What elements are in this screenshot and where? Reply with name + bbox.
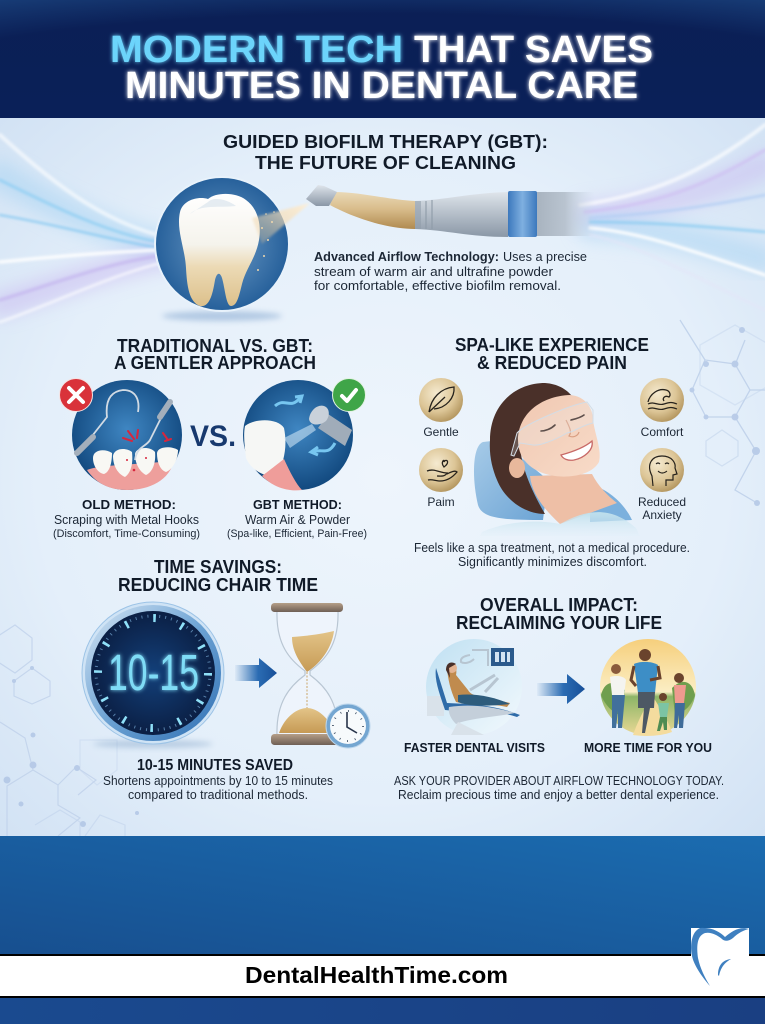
molecular hexagon pattern: left	[0, 625, 139, 836]
title: MINUTES IN DENTAL CARE	[125, 65, 638, 107]
logo: tooth mark	[691, 928, 749, 986]
hair	[490, 383, 572, 514]
face	[518, 395, 600, 477]
heading: overall impact	[456, 595, 662, 633]
heading: spa-like: SPA-LIKE EXPERIENCE	[455, 335, 649, 355]
text: GBT method: (Spa-like, Efficient, Pain-Free)	[227, 528, 367, 540]
heading: time savings	[118, 557, 318, 595]
icon: reduced anxiety head	[640, 448, 684, 492]
text: old method: Scraping with Metal Hooks	[54, 513, 199, 527]
heading: spa-like	[455, 335, 649, 373]
section: traditional vs GBT	[53, 336, 367, 540]
label: Reduced Anxiety: Reduced	[638, 495, 686, 509]
safety glasses	[511, 402, 593, 456]
chair headrest	[474, 440, 548, 520]
text: old method	[53, 497, 200, 540]
icon: tooth in circle	[155, 177, 289, 311]
heading: traditional vs GBT: A GENTLER APPROACH	[114, 353, 316, 373]
icon: green check badge	[332, 378, 366, 412]
text: old method: (Discomfort, Time-Consuming)	[53, 528, 200, 540]
left airflow swooshes	[0, 135, 170, 322]
icon: hourglass	[271, 603, 343, 745]
smile	[561, 441, 592, 460]
text: minutes saved: compared to traditional methods.	[128, 788, 308, 802]
footer website text: DentalHealthTime.com	[245, 962, 508, 988]
section: overall impact	[394, 595, 724, 802]
VS label: VS.	[190, 420, 236, 453]
icon: digital timer dial: 10-15	[108, 644, 199, 701]
text: spa description: Significantly minimizes discomfort.	[458, 555, 647, 569]
text: GBT method	[227, 497, 367, 540]
header band	[0, 0, 765, 118]
ear	[509, 458, 525, 478]
shadow under tooth circle	[162, 311, 282, 321]
icon: red X badge	[60, 378, 92, 412]
nose shadow	[566, 420, 579, 437]
heading: GBT: GUIDED BIOFILM THERAPY (GBT):	[223, 132, 548, 152]
icon: GBT method airflow	[243, 380, 353, 490]
page background	[0, 118, 765, 836]
right airflow swooshes	[580, 125, 765, 310]
label: Reduced Anxiety	[638, 495, 686, 522]
bottom blue strip	[0, 997, 765, 1024]
arrow: clock to hourglass	[235, 658, 277, 688]
smock	[480, 512, 640, 536]
text: GBT method: GBT METHOD:	[253, 497, 342, 512]
heading: GBT: THE FUTURE OF CLEANING	[255, 153, 516, 173]
text: minutes saved: 10-15 MINUTES SAVED	[137, 757, 293, 774]
neck	[530, 474, 617, 524]
icon: comfort wave	[640, 378, 684, 422]
section: guided biofilm therapy	[155, 132, 595, 321]
icon: dental clinic chair	[426, 639, 522, 735]
heading: traditional vs GBT	[114, 336, 316, 373]
label: more time for you: MORE TIME FOR YOU	[584, 740, 712, 755]
icon: palm with heart	[419, 448, 463, 492]
text: airflow description	[314, 250, 587, 293]
label: faster dental visits: FASTER DENTAL VISITS	[404, 740, 545, 755]
text: call to action	[394, 774, 724, 802]
text: airflow description: Uses a precise	[503, 250, 587, 264]
text: spa description: Feels like a spa treatment, not a medical procedure.	[414, 541, 690, 555]
label: Gentle: Gentle	[423, 425, 459, 439]
icon: small wall clock	[326, 704, 370, 748]
heading: time savings: TIME SAVINGS:	[154, 557, 282, 577]
arrow: visits to free time	[537, 674, 585, 704]
blue lower band	[0, 836, 765, 955]
closed eyes	[541, 415, 584, 431]
heading: time savings: REDUCING CHAIR TIME	[118, 575, 318, 595]
section: time savings	[82, 557, 370, 802]
icon: family jogging	[600, 639, 696, 736]
text: minutes saved: Shortens appointments by 10 to 15 minutes	[103, 774, 333, 788]
text: old method: OLD METHOD:	[82, 497, 176, 512]
heading: overall impact: OVERALL IMPACT:	[480, 595, 638, 615]
label: Comfort: Comfort	[641, 425, 684, 439]
text: airflow description: Advanced Airflow Technology:	[314, 250, 499, 264]
text: GBT method: Warm Air & Powder	[245, 513, 350, 527]
heading: GBT	[223, 132, 548, 173]
text: airflow description: for comfortable, effective biofilm removal.	[314, 279, 561, 293]
icon: old method scraping	[72, 380, 182, 490]
heading: spa-like: & REDUCED PAIN	[477, 353, 627, 373]
text: airflow description: stream of warm air and ultrafine powder	[314, 265, 553, 279]
heading: traditional vs GBT: TRADITIONAL VS. GBT:	[117, 336, 313, 356]
title	[110, 29, 653, 107]
illustration: relaxed patient	[474, 383, 640, 536]
text: call to action: ASK YOUR PROVIDER ABOUT AIRFLOW TECHNOLOGY TODAY.	[394, 774, 724, 788]
spray jet	[252, 203, 310, 244]
heading: overall impact: RECLAIMING YOUR LIFE	[456, 613, 662, 633]
molecular hexagon pattern: right	[680, 320, 765, 506]
title: MODERN TECH	[110, 29, 403, 71]
section: spa-like experience	[414, 335, 690, 569]
text: minutes saved	[103, 757, 333, 802]
icon: digital timer dial	[82, 602, 224, 748]
icon: dental handpiece	[306, 185, 595, 237]
title: THAT SAVES	[414, 29, 653, 71]
label: Paim: Paim	[427, 495, 455, 509]
chair right side	[590, 484, 632, 522]
text: spa description	[414, 541, 690, 569]
icon: gentle feather	[419, 378, 463, 422]
text: call to action: Reclaim precious time and enjoy a better dental experience.	[398, 788, 719, 802]
footer white bar	[0, 955, 765, 997]
label: Reduced Anxiety: Anxiety	[642, 508, 682, 522]
